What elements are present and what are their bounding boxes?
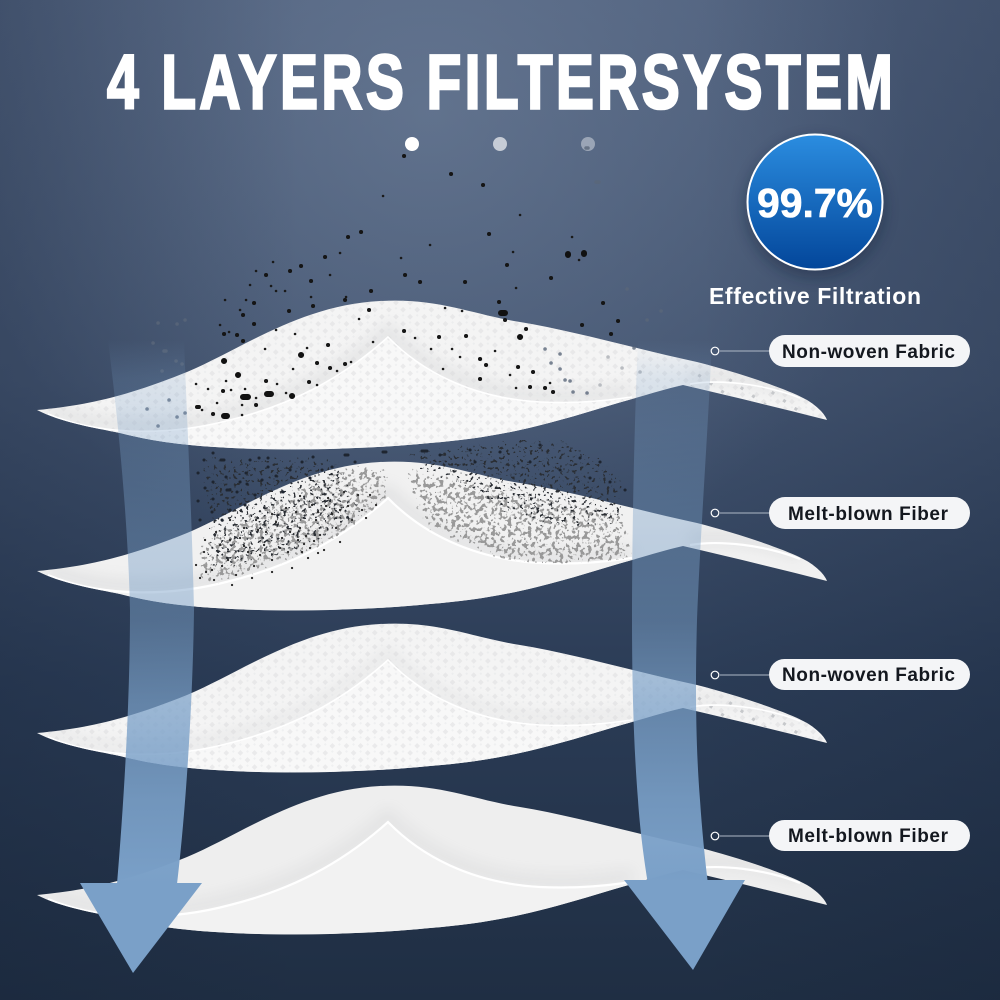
- speckle fields on second layer and in the gap above it: [199, 440, 632, 584]
- layer 4: melt-blown fiber sheet: [37, 786, 827, 934]
- speckle field: dark in gap and second layer, right: [409, 440, 623, 531]
- particles: faded grey drifting: [147, 148, 661, 426]
- particles: large black on first layer: [224, 253, 584, 416]
- label: melt-blown fiber 2: [711, 820, 970, 851]
- filtered clean air dots: [405, 137, 595, 151]
- arrow: right airflow: [624, 340, 745, 970]
- arrow: left airflow: [80, 340, 202, 973]
- layer 1: non-woven fabric sheet: [37, 301, 827, 449]
- particles: pale grey fading out: [600, 357, 640, 385]
- label: non-woven fabric 1: Non-woven Fabric: [782, 342, 955, 363]
- particles: small black flecks: [196, 196, 579, 415]
- particles: fine black on second layer, left: [196, 492, 376, 585]
- caption: effective filtration: Effective Filtration: [709, 283, 921, 309]
- label: melt-blown fiber 1: Melt-blown Fiber: [788, 504, 949, 525]
- label: non-woven fabric 2: [711, 659, 970, 690]
- dust particles: [147, 148, 661, 595]
- particles: medium black above and on first layer: [197, 156, 618, 414]
- label: non-woven fabric 1: [711, 335, 970, 367]
- title: 4 LAYERS FILTERSYSTEM: [107, 40, 893, 126]
- label: melt-blown fiber 2: Melt-blown Fiber: [788, 826, 949, 847]
- badge: 99.7%: [745, 134, 885, 278]
- speckle field: dark on second layer and gap, left: [204, 457, 362, 571]
- speckle field: grey on second layer, right: [408, 468, 632, 564]
- label: melt-blown fiber 1: [711, 497, 970, 529]
- badge: 99.7%: 99.7%: [757, 180, 873, 226]
- layer 2: melt-blown fiber sheet: [37, 462, 827, 610]
- layer 3: non-woven fabric sheet: [37, 624, 827, 772]
- label: non-woven fabric 2: Non-woven Fabric: [782, 665, 955, 686]
- particles: between first and second layers: [198, 445, 625, 520]
- speckle field: grey on second layer, left: [199, 466, 388, 584]
